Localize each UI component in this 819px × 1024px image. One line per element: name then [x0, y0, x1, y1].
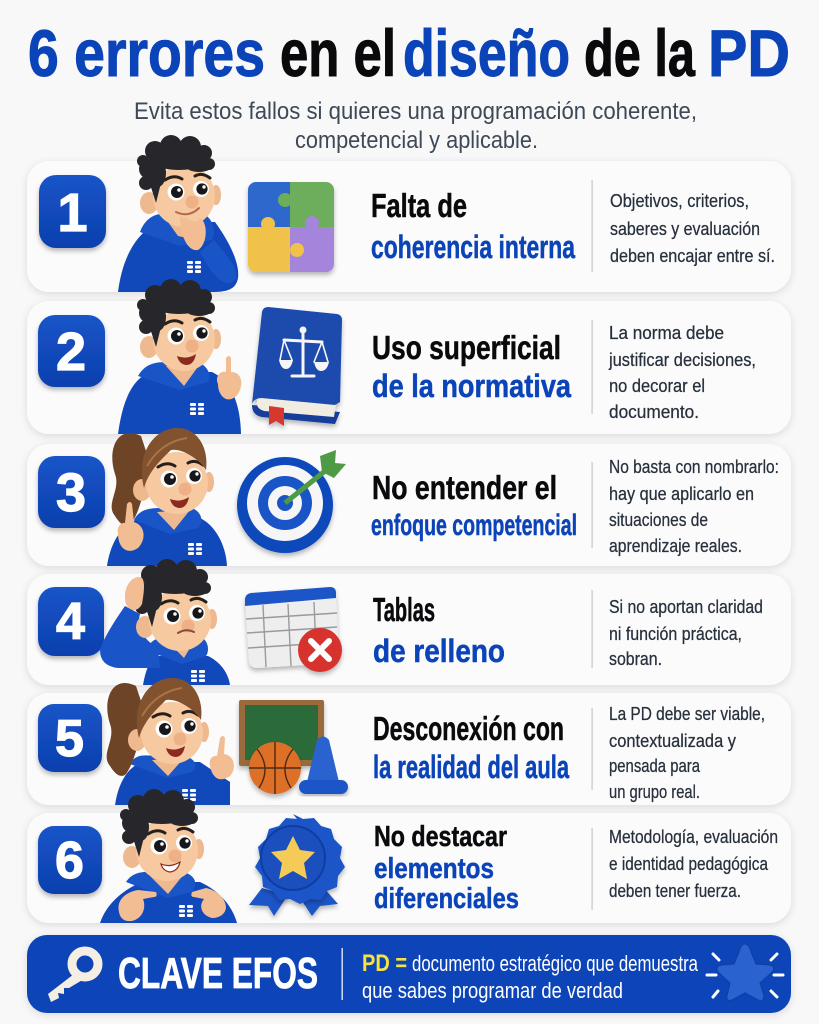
text 3 — [609, 457, 779, 556]
heading 6: diferenciales — [374, 883, 519, 915]
heading 4 — [373, 591, 505, 669]
number badge 5 — [38, 704, 102, 772]
icon: chalkboard, ball and cone — [239, 700, 348, 794]
definition text: PD = — [362, 950, 407, 977]
subtitle: competencial y aplicable. — [295, 127, 538, 154]
panel: error 6 — [27, 789, 791, 923]
definition text: documento estratégico que demuestra — [412, 951, 699, 976]
number badge 4: 4 — [56, 593, 85, 651]
icon: law book — [252, 307, 342, 426]
number badge 6: 6 — [55, 832, 84, 890]
text 4 — [609, 597, 763, 669]
label: CLAVE EFOS — [118, 949, 318, 998]
icon: puzzle — [248, 182, 334, 272]
title: de la — [584, 16, 696, 90]
text 5: pensada para — [609, 756, 701, 776]
title: diseño — [403, 16, 570, 90]
heading 6: No destacar — [374, 821, 507, 853]
icon: medal with star — [249, 814, 345, 916]
title — [28, 16, 790, 90]
character: boy pointing at himself — [100, 789, 237, 923]
subtitle: Evita estos fallos si quieres una programación coherente, — [134, 98, 697, 125]
heading 2: Uso superficial — [372, 329, 561, 366]
panel: error 1 — [27, 135, 791, 292]
character: girl with ponytail pointing up — [107, 678, 234, 805]
definition text: que sabes programar de verdad — [362, 978, 623, 1003]
number badge 2 — [38, 315, 105, 387]
heading 5 — [373, 710, 569, 785]
character: girl pointing up — [107, 428, 227, 566]
title: 6 errores — [28, 16, 265, 90]
text 6: Metodología, evaluación — [609, 827, 778, 847]
heading 1 — [371, 187, 575, 265]
number badge 4 — [38, 587, 104, 656]
text 1: deben encajar entre sí. — [610, 246, 775, 266]
text 3: situaciones de — [609, 510, 708, 530]
text 4: ni función práctica, — [609, 624, 742, 644]
text 3: hay que aplicarlo en — [609, 484, 754, 504]
number badge 3: 3 — [56, 463, 86, 523]
heading 4: de relleno — [373, 633, 505, 669]
heading 3: enfoque competencial — [371, 509, 577, 542]
title: en el — [280, 16, 396, 90]
text 2 — [608, 323, 756, 422]
number badge 6 — [38, 826, 102, 894]
text 3: No basta con nombrarlo: — [609, 457, 779, 477]
icon: target with arrow — [237, 450, 346, 553]
callout: clave EFOS — [27, 935, 791, 1013]
text 1: saberes y evaluación — [610, 219, 760, 239]
icon: table with error mark — [245, 587, 342, 672]
number badge 3 — [38, 456, 105, 528]
text 5: un grupo real. — [609, 782, 700, 802]
heading 1: coherencia interna — [371, 229, 575, 265]
icon: key — [48, 951, 98, 1002]
number badge 1 — [39, 175, 106, 248]
heading 3: No entender el — [372, 469, 557, 506]
text 6: e identidad pedagógica — [609, 854, 769, 874]
title: PD — [708, 16, 790, 90]
definition text — [362, 950, 699, 1003]
text 4: sobran. — [609, 649, 662, 669]
text 2: justificar decisiones, — [608, 350, 756, 370]
heading 2: de la normativa — [372, 368, 571, 404]
number badge 1: 1 — [57, 183, 88, 243]
icon: star with rays — [707, 944, 783, 1000]
heading 4: Tablas — [373, 591, 435, 628]
text 3: aprendizaje reales. — [609, 536, 742, 556]
text 5: contextualizada y — [609, 731, 736, 751]
panel: error 2 — [27, 279, 791, 434]
character: thinking boy — [118, 135, 238, 292]
subtitle — [134, 98, 697, 154]
text 6: deben tener fuerza. — [609, 881, 741, 901]
text 1: Objetivos, criterios, — [610, 191, 749, 211]
panel: error 3 — [27, 428, 791, 566]
text 4: Si no aportan claridad — [609, 597, 763, 617]
panel: error 5 — [27, 678, 791, 805]
number badge 2: 2 — [56, 322, 86, 382]
text 2: no decorar el — [609, 376, 705, 396]
text 2: La norma debe — [609, 323, 724, 343]
text 5: La PD debe ser viable, — [609, 704, 765, 724]
heading 3 — [371, 469, 577, 542]
heading 2 — [372, 329, 571, 404]
text 2: documento. — [609, 402, 699, 422]
number badge 5: 5 — [55, 710, 84, 768]
text 6 — [609, 827, 778, 901]
character: boy pointing up — [118, 279, 241, 434]
text 5 — [609, 704, 765, 802]
text 1 — [610, 191, 775, 266]
heading 5: Desconexión con — [373, 710, 564, 747]
heading 6 — [374, 821, 519, 915]
heading 1: Falta de — [371, 187, 467, 224]
character: boy scratching head — [100, 559, 230, 685]
heading 5: la realidad del aula — [373, 749, 569, 785]
panel: error 4 — [27, 559, 791, 685]
heading 6: elementos — [374, 853, 494, 885]
